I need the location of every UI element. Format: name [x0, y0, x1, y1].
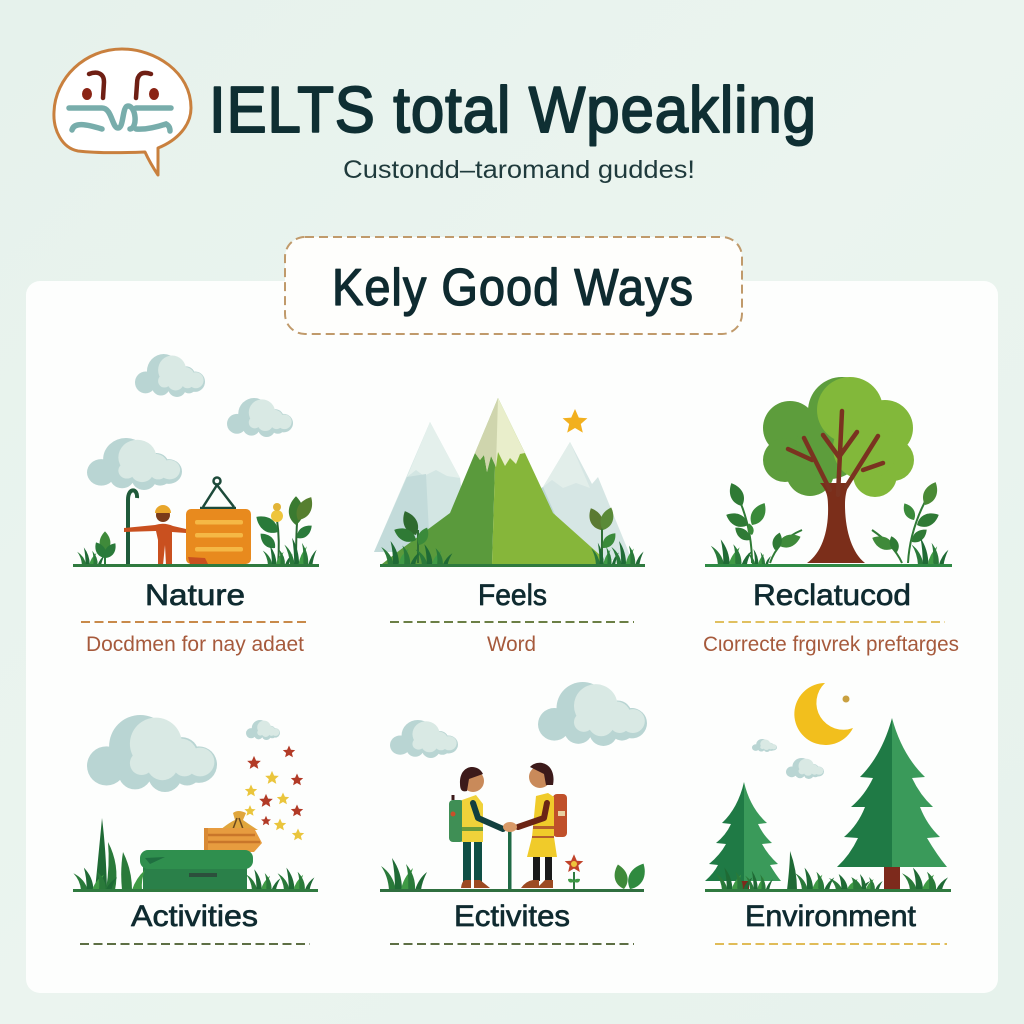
dashed rule	[715, 943, 947, 945]
falling stars	[244, 746, 304, 840]
flower	[565, 854, 583, 889]
title: IELTS total Wpeakling	[209, 74, 816, 147]
heading: Feels	[478, 579, 547, 612]
plants	[77, 494, 317, 565]
subtitle: Custondd–taromand guddes!	[343, 156, 695, 184]
ground line	[380, 564, 645, 567]
tree	[763, 377, 914, 563]
ground line	[705, 889, 951, 892]
panel: environment	[705, 683, 951, 944]
heading: Environment	[745, 900, 917, 933]
heading: Nature	[145, 579, 245, 612]
two hikers shaking hands	[449, 763, 567, 890]
dashed rule	[81, 621, 310, 623]
badge heading: Kely Good Ways	[332, 259, 693, 317]
grass	[716, 851, 948, 890]
heading: Activities	[131, 900, 258, 933]
panel: nature	[73, 354, 319, 656]
plants	[381, 505, 644, 565]
panel: feels	[374, 398, 645, 656]
mountains	[374, 398, 632, 564]
clouds	[752, 739, 824, 779]
person with cane and orange sign	[124, 478, 251, 565]
small pine tree	[705, 782, 781, 890]
ground line	[73, 564, 319, 567]
panel: reclatucod	[703, 377, 959, 656]
clouds	[390, 682, 647, 758]
panel: activities	[73, 715, 318, 944]
panel: ectivites	[380, 682, 650, 944]
plants	[711, 479, 948, 565]
main white panel	[26, 281, 998, 993]
small star	[842, 696, 850, 702]
crescent moon	[794, 683, 853, 745]
heading: Reclatucod	[753, 579, 911, 612]
dashed rule	[390, 621, 634, 623]
dashed rule	[80, 943, 310, 945]
clouds	[87, 354, 293, 490]
logo: speech bubble	[54, 49, 191, 175]
heading: Ectivites	[454, 900, 570, 933]
dashed rule	[390, 943, 634, 945]
grass	[381, 858, 650, 892]
ground line	[73, 889, 318, 892]
green case	[140, 850, 253, 890]
grass	[73, 818, 314, 890]
clouds	[87, 715, 280, 792]
crate with bag	[204, 811, 262, 852]
description: Word	[487, 633, 536, 656]
ground line	[705, 564, 952, 567]
large pine tree	[837, 718, 947, 890]
ground line	[380, 889, 644, 892]
star	[563, 409, 587, 433]
description: Cιorrecte frgιvrek preftarges	[703, 633, 959, 656]
section badge	[285, 237, 742, 334]
description: Docdmen for nay adaet	[86, 633, 304, 656]
dashed rule	[715, 621, 945, 623]
